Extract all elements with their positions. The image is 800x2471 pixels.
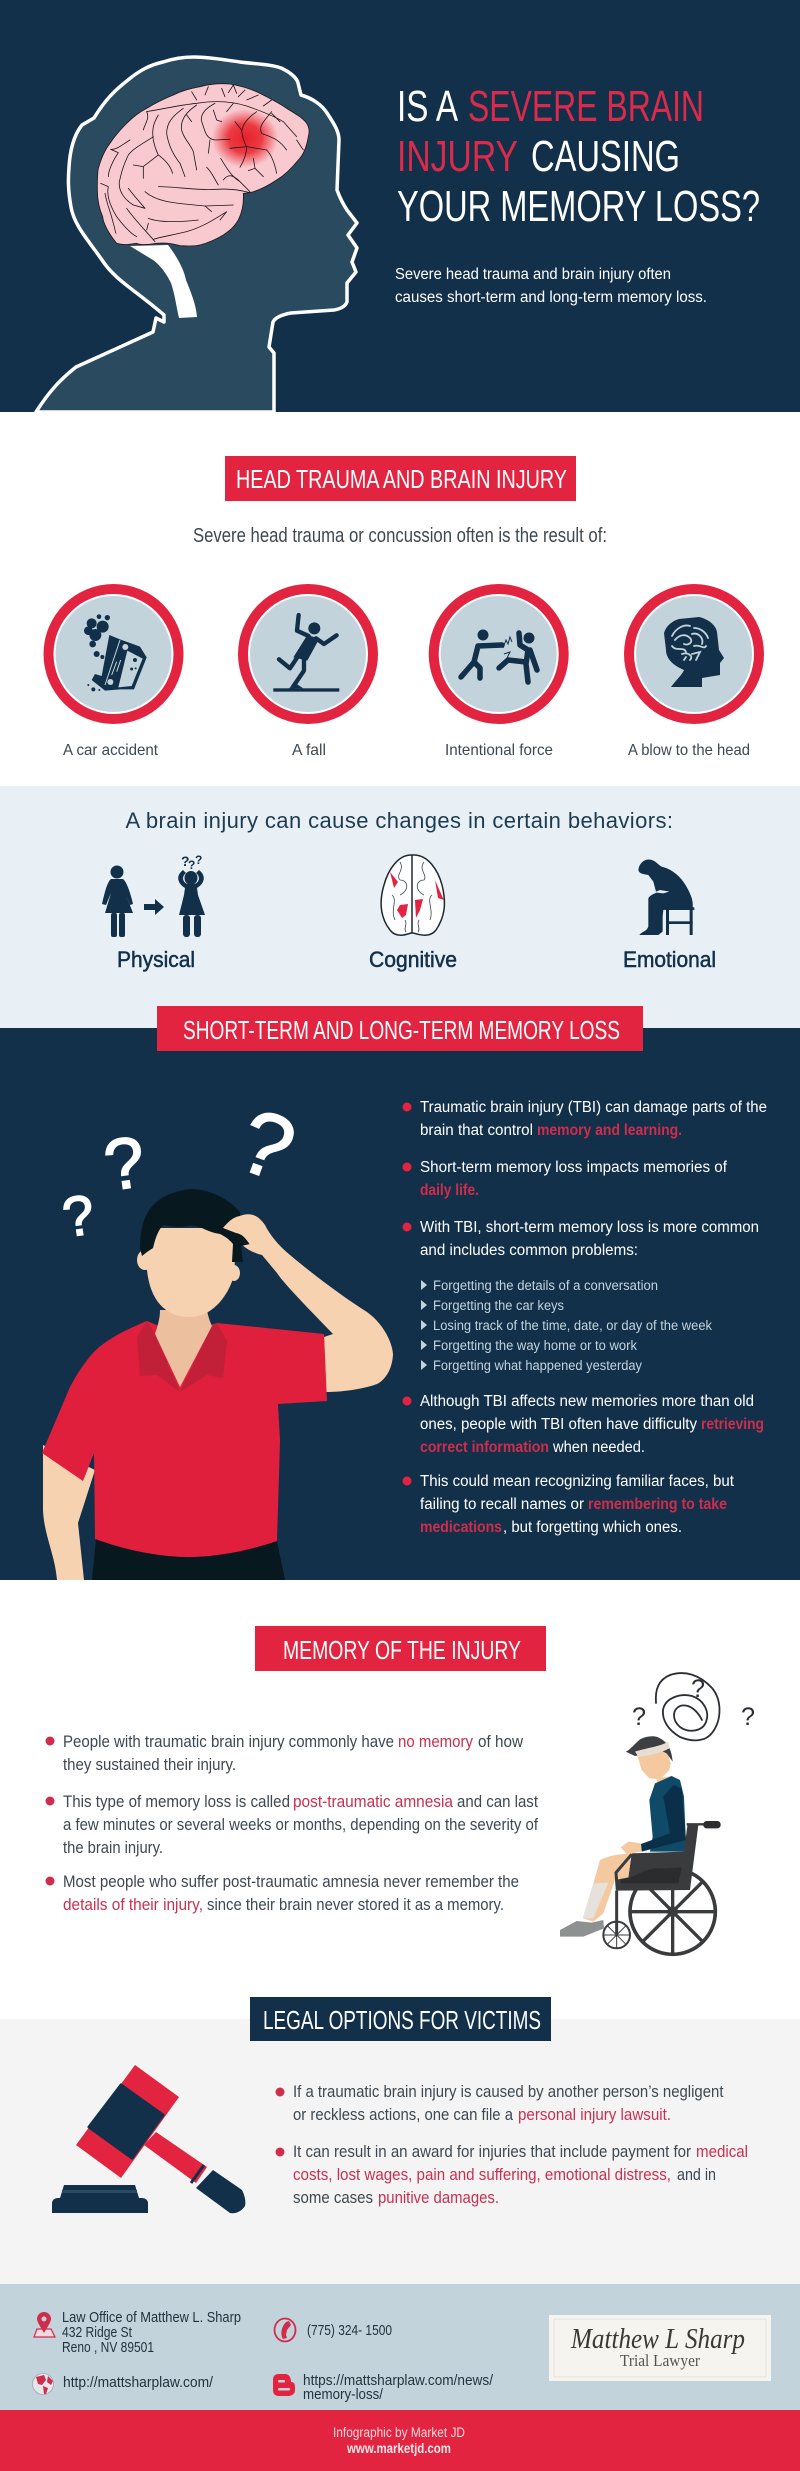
bullet list: costs, lost wages, pain and suffering, emotional distress,: [293, 2166, 671, 2184]
panel: memory of the injury: [46, 1626, 755, 1954]
bullet list: and can last: [457, 1793, 538, 1811]
illustration: confused thought spiral: ?: [632, 1703, 646, 1731]
bullet list: since their brain never stored it as a memory.: [207, 1896, 504, 1914]
bullet list: Short-term memory loss impacts memories of: [420, 1159, 728, 1176]
address: 432 Ridge St: [62, 2324, 133, 2341]
bullet list: or reckless actions, one can file a: [293, 2106, 514, 2124]
icon: blow to the head: [624, 584, 764, 724]
icon: phone: [274, 2318, 296, 2342]
address: [62, 2309, 241, 2356]
bullet list: medications: [420, 1519, 502, 1536]
bullet list: retrieving: [701, 1416, 764, 1433]
bullet list: This type of memory loss is called: [63, 1793, 290, 1811]
behavior labels: Cognitive: [369, 947, 457, 972]
title: CAUSING: [531, 132, 680, 181]
title: IS A: [397, 82, 458, 131]
illustration: injured man in wheelchair: [560, 1736, 721, 1954]
bullet list: punitive damages.: [378, 2189, 499, 2207]
icon: cognitive brain: [381, 855, 444, 935]
bullet list: of how: [478, 1733, 523, 1751]
bullet list: People with traumatic brain injury commonly have: [63, 1733, 394, 1751]
logo: Matthew L Sharp: Trial Lawyer: [620, 2351, 700, 2370]
sub-list of common problems: Losing track of the time, date, or day of the week: [433, 1318, 712, 1333]
bullet list: Traumatic brain injury (TBI) can damage parts of the: [420, 1099, 767, 1116]
icon: map pin: [34, 2312, 55, 2337]
behaviors heading: A brain injury can cause changes in certain behaviors:: [126, 808, 673, 833]
bullet list: they sustained their injury.: [63, 1756, 236, 1774]
panel: contact footer: [0, 2284, 800, 2410]
behavior labels: [117, 947, 716, 972]
question marks: ?: [99, 1122, 150, 1207]
bullet list: Most people who suffer post-traumatic amnesia never remember the: [63, 1873, 519, 1891]
header description: [395, 266, 707, 306]
question marks: [58, 1090, 307, 1249]
phone number: (775) 324- 1500: [307, 2322, 392, 2339]
sub-list of common problems: Forgetting what happened yesterday: [433, 1358, 642, 1373]
bullet list: no memory: [398, 1733, 474, 1751]
heading banner: MEMORY OF THE INJURY: [283, 1635, 521, 1665]
address: Law Office of Matthew L. Sharp: [62, 2309, 241, 2326]
cause labels: [63, 742, 750, 759]
address: Reno , NV 89501: [62, 2339, 154, 2356]
bullet list: [402, 1099, 767, 1536]
bullet list: failing to recall names or: [420, 1496, 584, 1513]
behavior labels: Emotional: [623, 947, 716, 972]
panel: legal options for victims: [0, 1997, 800, 2284]
illustration: brain with injury glow: [97, 84, 309, 246]
illustration: confused man: [42, 1090, 393, 1580]
logo: Matthew L Sharp: Matthew L Sharp: [570, 2324, 745, 2355]
bullet list: some cases: [293, 2189, 373, 2207]
news link: https://mattsharplaw.com/news/: [303, 2372, 494, 2389]
bullet list: With TBI, short-term memory loss is more common: [420, 1219, 759, 1236]
cause labels: Intentional force: [445, 742, 553, 759]
icon: fall: [238, 584, 378, 724]
logo: Matthew L Sharp: [549, 2315, 771, 2381]
panel: header: [0, 0, 800, 412]
bullet list: the brain injury.: [63, 1839, 163, 1857]
bullet list: memory and learning.: [537, 1122, 682, 1139]
panel: head trauma and brain injury: [44, 456, 764, 759]
icon: globe: [32, 2374, 54, 2394]
icon: car accident: [44, 584, 184, 724]
bullet list: personal injury lawsuit.: [518, 2106, 671, 2124]
heading banner: [157, 1006, 643, 1051]
title: INJURY: [397, 132, 518, 181]
header description: causes short-term and long-term memory loss.: [395, 289, 707, 306]
bullet list: remembering to take: [588, 1496, 727, 1513]
illustration: confused thought spiral: [632, 1673, 755, 1740]
icon: physical: [102, 853, 205, 937]
panel: credits bar: www.marketjd.com: [346, 2441, 451, 2456]
bullet list: brain that control: [420, 1122, 533, 1139]
bullet list: when needed.: [552, 1439, 645, 1456]
icon: physical: ?: [181, 853, 190, 869]
icon: blog: [273, 2374, 295, 2396]
cause labels: A car accident: [63, 742, 159, 759]
heading banner: [255, 1626, 546, 1671]
heading banner: SHORT-TERM AND LONG-TERM MEMORY LOSS: [183, 1015, 620, 1045]
website: http://mattsharplaw.com/: [63, 2374, 214, 2391]
panel: credits bar: Infographic by Market JD: [333, 2425, 465, 2440]
bullet list: It can result in an award for injuries that include payment for: [293, 2143, 691, 2161]
subheading: Severe head trauma or concussion often is the result of:: [193, 525, 607, 547]
icon: physical: ?: [188, 858, 195, 872]
heading banner: [250, 1997, 551, 2041]
bullet list: and includes common problems:: [420, 1242, 638, 1259]
icon: intentional force: [429, 584, 569, 724]
sub-list of common problems: Forgetting the way home or to work: [433, 1338, 637, 1353]
sub-list of common problems: Forgetting the details of a conversation: [433, 1278, 658, 1293]
bullet list: ones, people with TBI often have difficulty: [420, 1416, 697, 1433]
bullet list: details of their injury,: [63, 1896, 203, 1914]
question marks: ?: [226, 1090, 307, 1201]
bullet list: [46, 1733, 538, 1914]
cause labels: A blow to the head: [628, 742, 750, 759]
behavior labels: Physical: [117, 947, 195, 972]
bullet list: [276, 2083, 748, 2207]
title: [397, 82, 760, 231]
bullet list: , but forgetting which ones.: [503, 1519, 682, 1536]
panel: short-term and long-term memory loss: [0, 1006, 800, 1580]
bullet list: correct information: [420, 1439, 549, 1456]
panel: credits bar: [0, 2410, 800, 2471]
bullet list: a few minutes or several weeks or months, depending on the severity of: [63, 1816, 538, 1834]
news link: [303, 2372, 494, 2403]
illustration: confused thought spiral: ?: [741, 1703, 755, 1731]
icon: gavel: [52, 2065, 245, 2213]
illustration: head silhouette: [36, 57, 357, 412]
cause labels: A fall: [292, 742, 326, 759]
icon: physical: ?: [195, 853, 202, 867]
illustration: confused thought spiral: ?: [691, 1675, 705, 1703]
heading banner: LEGAL OPTIONS FOR VICTIMS: [263, 2005, 541, 2035]
bullet list: Although TBI affects new memories more than old: [420, 1393, 754, 1410]
icon: emotional: [638, 860, 694, 935]
bullet list: This could mean recognizing familiar faces, but: [420, 1473, 735, 1490]
news link: memory-loss/: [303, 2386, 384, 2403]
panel: behaviors: [0, 786, 800, 1028]
bullet list: daily life.: [420, 1182, 479, 1199]
sub-list of common problems: [421, 1278, 712, 1373]
header description: Severe head trauma and brain injury often: [395, 266, 671, 283]
illustration: spinal cord: [130, 245, 197, 318]
heading banner: [225, 456, 576, 501]
bullet list: medical: [696, 2143, 748, 2161]
bullet list: If a traumatic brain injury is caused by another person’s negligent: [293, 2083, 724, 2101]
heading banner: HEAD TRAUMA AND BRAIN INJURY: [236, 464, 567, 494]
title: SEVERE BRAIN: [468, 82, 704, 131]
bullet list: post-traumatic amnesia: [293, 1793, 454, 1811]
question marks: ?: [58, 1182, 98, 1249]
bullet list: and in: [677, 2166, 716, 2184]
sub-list of common problems: Forgetting the car keys: [433, 1298, 564, 1313]
